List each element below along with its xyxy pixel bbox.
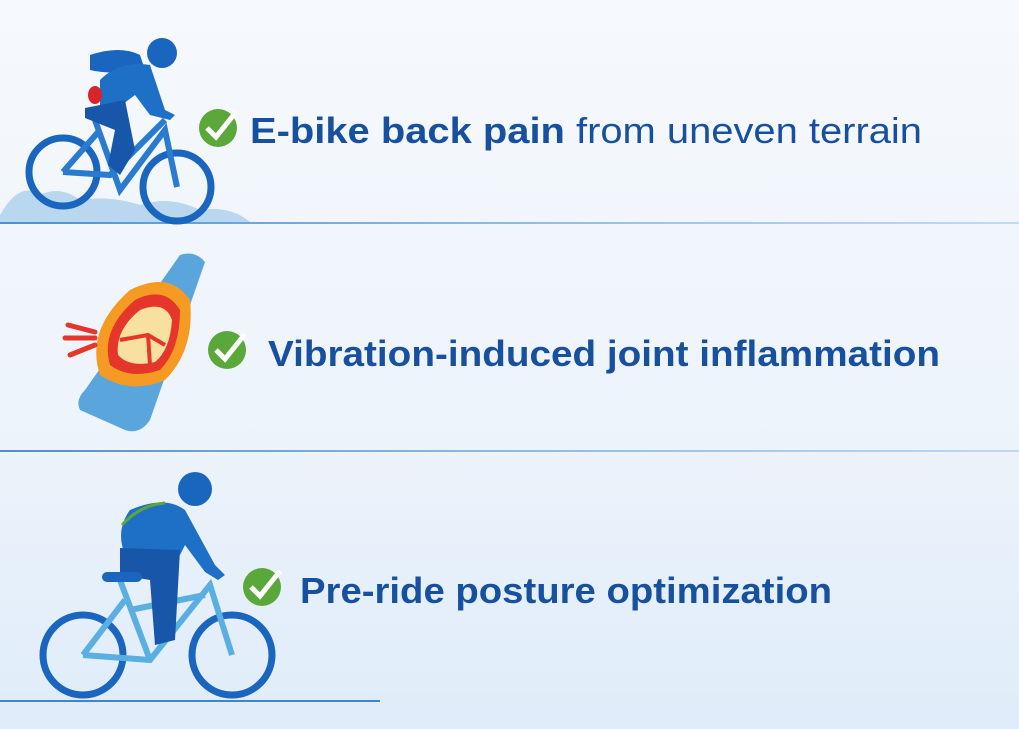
icon: check 1 [199,109,237,147]
icon: check 3 [243,568,281,606]
icon: inflamed joint [65,254,205,431]
heading 3: Pre-ride posture optimization [300,570,832,611]
icon: cyclist with back pain [0,38,250,222]
heading 2: Vibration-induced joint inflammation [268,333,940,374]
icon: check 2 [208,331,246,369]
heading 1: E-bike back pain from uneven terrain [250,110,922,151]
icon: cyclist good posture [43,472,272,695]
